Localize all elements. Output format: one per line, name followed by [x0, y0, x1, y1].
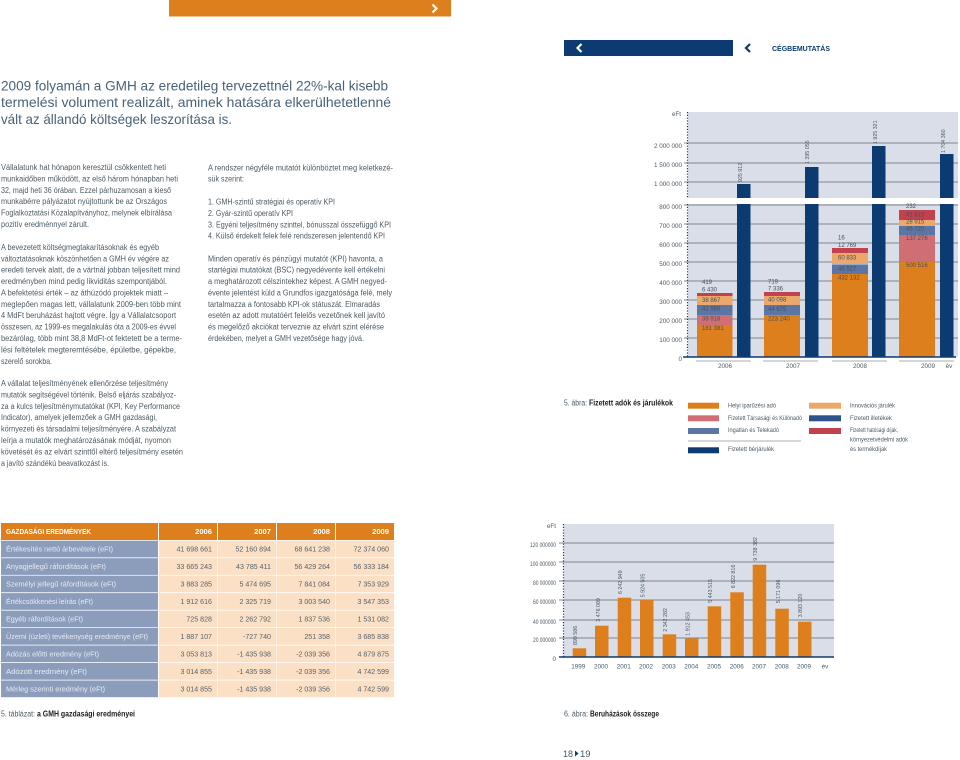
body text: second column: tartalmazza a fontosabb KPI-ok státuszát. Elmaradás: [208, 300, 380, 309]
body text: second column: 1. GMH-szintű stratégiai és operatív KPI: [208, 198, 335, 207]
baseline and x axis labels: [683, 357, 956, 370]
legend: Helyi iparűzési adó: [728, 402, 777, 409]
row: pre-tax result: 3 053 813: [180, 650, 212, 658]
row: other costs: [6, 615, 389, 624]
body text: first column middle: lési feltételek megteremtésébe, épületbe, gépekbe,: [1, 345, 176, 354]
bar value labels: 899 586: [573, 626, 579, 645]
headline: termelési volument realizált, aminek hatására elkerülhetetlenné: [1, 94, 391, 110]
chart background: [688, 112, 958, 357]
row: operating result: -727 740: [243, 633, 271, 641]
y axis labels: 0: [678, 356, 682, 363]
row: other costs: 1 837 536: [298, 616, 330, 624]
navy bar value labels: 1 925 321: [873, 120, 879, 144]
row: material costs: 43 785 411: [236, 563, 271, 571]
legend: Fizetett illetékek: [850, 415, 893, 422]
navy bar value labels: [738, 120, 947, 182]
row: balance sheet result: [6, 684, 389, 694]
body text: second column: startégiai mutatókat (BSC) negyedévente kell értékelni: [208, 266, 385, 275]
bar value labels: 5 443 515: [708, 579, 714, 603]
body text: first column middle: eredeti tervek alatt, de a vártnál jobban teljesített mind: [1, 266, 180, 275]
stacked bar 2008: 46 527: [838, 266, 857, 272]
body text: first column middle: szerelő sorokba.: [1, 357, 52, 366]
row: balance sheet result: 4 742 599: [357, 686, 389, 694]
y axis labels: 100 000: [659, 337, 682, 344]
body text: first column middle: [1, 243, 182, 366]
baseline and x axis labels: 2008: [775, 664, 789, 670]
baseline and x axis labels: 2009: [921, 363, 935, 370]
baseline and x axis labels: [559, 657, 834, 670]
chart background: [564, 524, 834, 657]
legend: [688, 402, 909, 453]
row: after-tax result: -1 435 938: [237, 668, 271, 676]
y axis labels: 500 000: [659, 261, 682, 268]
caption: table 5: 5. táblázat:: [1, 710, 35, 718]
navy bar value labels: 1 395 055: [805, 140, 811, 164]
bar value labels: 5 171 096: [776, 580, 782, 603]
row: other costs: Egyéb ráfordítások (eFt): [6, 615, 83, 624]
gridlines and axis: [559, 524, 834, 657]
y axis labels: 100 000000: [530, 561, 556, 568]
top orange navigation bar: [169, 0, 451, 16]
navy bar value labels: 1 704 360: [941, 129, 947, 153]
row: after-tax result: 3 014 855: [180, 668, 212, 676]
body text: second column: esetén az adott mutatóért felelős vezetőnek kell javító: [208, 311, 386, 320]
y axis labels: 40 000000: [533, 619, 556, 626]
row: net sales: 52 160 894: [235, 546, 271, 554]
y axis labels: [654, 111, 682, 363]
row: depreciation: Értékcsökkenési leírás (eFt): [6, 597, 93, 606]
legend: Innovációs járulék: [850, 402, 896, 409]
baseline and x axis labels: év: [822, 664, 829, 670]
baseline and x axis labels: 2002: [639, 664, 653, 670]
body text: second column: [208, 163, 393, 343]
stacked bar 2007: [764, 280, 800, 357]
y axis labels: 2 000 000: [654, 143, 682, 150]
body text: first column middle: A bevezetett költségmegtakarításoknak és egyéb: [1, 243, 160, 252]
body text: first column top: [1, 163, 178, 229]
row: operating result: 1 887 107: [180, 633, 212, 641]
stacked bar 2008: 16: [838, 236, 845, 242]
table header: GAZDASÁGI EREDMÉNYEK: [6, 527, 91, 536]
y axis labels: 700 000: [659, 223, 682, 230]
table: economic results: [1, 523, 394, 697]
row: pre-tax result: [6, 650, 389, 658]
stacked bar 2006: 38 918: [702, 316, 721, 322]
stacked bar 2006: 42 980: [702, 306, 721, 312]
row: operating result: Üzemi (üzleti) tevékenység eredménye (eFt): [6, 632, 148, 641]
baseline and x axis labels: 2004: [684, 664, 699, 670]
stacked bar 2006: 6 430: [702, 288, 718, 294]
row: personnel costs: 3 883 285: [180, 581, 212, 589]
body text: first column top: 32, majd heti 36 órában. Ezzel párhuzamosan a kieső: [1, 186, 172, 195]
headline: [1, 78, 391, 127]
row: operating result: [6, 632, 389, 641]
row: net sales: 41 698 661: [176, 546, 212, 554]
body text: second column: sük szerint:: [208, 175, 244, 184]
stacked bar 2006: 181 381: [702, 326, 724, 332]
stacked bar chart: taxes and contributions: [654, 111, 958, 370]
orange investment bars: [573, 565, 812, 657]
row: balance sheet result: -2 039 356: [296, 686, 330, 694]
row: net sales: [6, 545, 389, 554]
row: material costs: [6, 562, 389, 571]
row: after-tax result: 4 742 599: [357, 668, 389, 676]
legend: Fizetett Társasági és Különadó: [728, 415, 802, 422]
legend: és termékdíjak: [850, 446, 888, 453]
caption: figure 6: 6. ábra:: [564, 710, 588, 718]
stacked bar 2008: 12 769: [838, 243, 857, 249]
row: after-tax result: Adózott eredmény (eFt): [6, 667, 87, 676]
stacked bar 2007: 7 336: [768, 286, 784, 292]
y axis labels: 800 000: [659, 204, 682, 211]
y axis labels: 60 000000: [533, 599, 556, 606]
row: other costs: 2 262 792: [239, 616, 271, 624]
row: balance sheet result: Mérleg szerinti eredmény (eFt): [6, 684, 105, 694]
bar value labels: 3 893 120: [798, 594, 804, 617]
baseline and x axis labels: 2001: [617, 664, 631, 670]
body text: first column bottom: követését és az elvárt szinttől eltérő teljesítmény esetén: [1, 447, 183, 456]
body text: first column top: Foglalkoztatási Közalapítványhoz, melynek elbírálása: [1, 209, 173, 218]
row: depreciation: 1 912 616: [180, 598, 212, 606]
stacked bar 2009: 41 615: [906, 212, 925, 218]
y axis labels: 0: [552, 656, 556, 663]
row: material costs: 33 665 243: [176, 563, 212, 571]
y axis labels: 80 000000: [533, 580, 556, 587]
section label: company presentation: [746, 44, 830, 53]
table header: 2006: [195, 527, 212, 536]
stacked bar 2009: 46 720: [906, 226, 925, 232]
y axis labels: 1 000 000: [654, 181, 682, 188]
stacked bar 2008: 60 833: [838, 256, 857, 262]
table header: 2009: [372, 527, 389, 536]
navy contribution bars: [737, 146, 954, 357]
body text: second column: 3. Egyéni teljesítmény szinttel, bónusszal összefüggő KPI: [208, 220, 391, 229]
row: other costs: 725 828: [186, 616, 212, 624]
row: other costs: 1 531 082: [357, 616, 389, 624]
table row backgrounds: [1, 541, 394, 697]
body text: first column middle: összesen, az 1999-es megalakulás óta a 2009-es évvel: [1, 323, 176, 332]
body text: first column top: munkaidőben működött, az első három hónapban heti: [1, 174, 178, 183]
row: operating result: 3 685 838: [357, 633, 389, 641]
bar value labels: 2 342 282: [663, 608, 669, 632]
stacked bar 2009: 137 276: [906, 236, 928, 242]
body text: first column bottom: [1, 379, 183, 468]
body text: first column bottom: Indicator), amelyek jellemzőek a GMH gazdasági,: [1, 413, 157, 422]
y axis labels: 200 000: [659, 318, 682, 325]
stacked bar 2006: 419: [702, 280, 713, 286]
body text: first column middle: meglepően magas lett, vállalatunk 2009-ben több mint: [1, 300, 182, 309]
stacked bar 2006: [697, 280, 732, 357]
y axis labels: 300 000: [659, 299, 682, 306]
body text: first column middle: eredményben mind pedig likviditás szempontjából.: [1, 277, 167, 286]
row: pre-tax result: 4 879 875: [357, 650, 389, 658]
stacked bar 2009: 232: [906, 204, 917, 210]
stacked bar 2007: 223 240: [768, 316, 790, 322]
table header: 2007: [254, 527, 271, 536]
baseline and x axis labels: 2006: [730, 664, 744, 670]
row: depreciation: 3 003 540: [298, 598, 330, 606]
stacked bar 2008: [832, 236, 868, 357]
legend: Fizetett hatósági díjak,: [850, 427, 898, 434]
row: net sales: 68 641 238: [294, 546, 330, 554]
body text: first column middle: A befektetési érték – az áthúzódó projektek miatt –: [1, 288, 169, 298]
table header: 2008: [313, 527, 330, 536]
row: personnel costs: 5 474 695: [239, 581, 271, 589]
body text: second column: A rendszer négyféle mutatót különböztet meg keletkezé-: [208, 163, 393, 172]
caption: figure 5: Fizetett adók és járulékok: [589, 398, 674, 408]
navy bar value labels: 925 912: [738, 163, 744, 182]
row: material costs: 56 429 264: [294, 563, 330, 571]
row: after-tax result: [6, 667, 389, 676]
body text: second column: 4. Külső érdekelt felek felé rendszeresen jelentendő KPI: [208, 232, 385, 241]
stacked bar 2008: 432 132: [838, 276, 860, 282]
baseline and x axis labels: 2007: [752, 664, 766, 670]
row: pre-tax result: -1 435 938: [237, 650, 271, 658]
y axis labels: [530, 523, 556, 663]
headline: 2009 folyamán a GMH az eredetileg tervezettnél 22%-kal kisebb: [1, 78, 388, 94]
section label: company presentation: CÉGBEMUTATÁS: [772, 44, 830, 53]
bar value labels: [573, 537, 804, 645]
bar value labels: 6 242 949: [618, 570, 624, 594]
body text: first column top: Vállalatunk hat hónapon keresztül csökkentett heti: [1, 163, 166, 172]
baseline and x axis labels: 2000: [594, 664, 608, 670]
row: depreciation: [6, 597, 389, 606]
table header: [1, 523, 394, 540]
caption: table 5: [1, 710, 135, 718]
y axis labels: eFt: [672, 111, 681, 118]
body text: second column: 2. Gyár-szintű operatív KPI: [208, 209, 293, 218]
y axis labels: eFt: [547, 523, 556, 530]
stacked bar 2007: 40 098: [768, 298, 787, 304]
stacked bar 2009: 28 915: [906, 220, 925, 226]
baseline and x axis labels: 2008: [853, 363, 867, 370]
y axis labels: 600 000: [659, 242, 682, 249]
headline: vált az állandó költségek leszorítása is.: [1, 111, 232, 127]
top navy navigation bar: [564, 40, 733, 56]
caption: figure 5: 5. ábra:: [564, 398, 587, 408]
stacked bar 2007: 719: [768, 280, 779, 286]
row: personnel costs: 7 353 929: [357, 581, 389, 589]
caption: figure 6: [564, 710, 660, 718]
row: pre-tax result: Adózás előtti eredmény (eFt): [6, 650, 99, 658]
body text: first column top: munkabérre pályázatot nyújtottunk be az Országos: [1, 197, 167, 206]
page numbers: 19: [580, 749, 590, 760]
bar value labels: 3 476 089: [596, 598, 602, 622]
bar value labels: 6 822 816: [731, 565, 737, 588]
body text: first column bottom: za a kulcs teljesítménymutatókat (KPI, Key Performance: [1, 402, 180, 411]
bar value labels: 5 924 505: [640, 574, 646, 597]
body text: second column: és megelőző akciókat terveznie az elvárt szint elérése: [208, 322, 384, 331]
gridlines and axis: [684, 112, 958, 357]
baseline and x axis labels: 2006: [718, 363, 732, 370]
bar chart: total investments: [530, 523, 834, 670]
row: operating result: 251 358: [304, 633, 330, 641]
row: depreciation: 3 547 353: [357, 598, 389, 606]
body text: first column bottom: a javító szándékú beavatkozást is.: [1, 459, 109, 468]
row: balance sheet result: 3 014 855: [180, 686, 212, 694]
y axis labels: 120 000000: [530, 542, 556, 549]
stacked bar 2009: [899, 204, 935, 357]
row: material costs: Anyagjellegű ráfordítások (eFt): [6, 562, 106, 571]
row: depreciation: 2 325 719: [239, 598, 271, 606]
caption: figure 6: Beruházások összege: [590, 710, 660, 718]
page numbers: [563, 749, 590, 760]
body text: first column bottom: mutatók segítségével történik. Belső eljárás szabályoz-: [1, 390, 176, 399]
row: pre-tax result: -2 039 356: [296, 650, 330, 658]
stacked bar 2007: 44 675: [768, 307, 787, 313]
body text: first column middle: bezárólag, több mint 38,8 MdFt-ot fektetett be a terme-: [1, 334, 182, 343]
page numbers: 18: [563, 749, 573, 760]
legend: Ingatlan és Telekadó: [728, 427, 779, 434]
body text: second column: érdekében, melyet a GMH vezetősége hagy jóvá.: [208, 334, 364, 343]
baseline and x axis labels: 1999: [571, 664, 586, 670]
legend: környezetvédelmi adók: [850, 436, 909, 444]
row: personnel costs: [6, 580, 389, 589]
body text: first column bottom: A vállalat teljesítményének ellenőrzése teljesítmény: [1, 379, 168, 388]
bar value labels: 1 912 453: [686, 612, 692, 636]
baseline and x axis labels: 2009: [797, 664, 811, 670]
bar value labels: 9 738 382: [753, 537, 759, 561]
baseline and x axis labels: 2007: [786, 363, 800, 370]
legend: Fizetett bérjárulék: [728, 446, 775, 453]
caption: table 5: a GMH gazdasági eredményei: [37, 710, 135, 718]
baseline and x axis labels: 2005: [707, 664, 721, 670]
row: after-tax result: -2 039 356: [296, 668, 330, 676]
body text: first column bottom: leírja a mutatók meghatározásának módját, nyomon: [1, 436, 171, 445]
row: balance sheet result: -1 435 938: [237, 686, 271, 694]
body text: first column bottom: környezeti és társadalmi teljesítményére. A szabályzat: [1, 425, 177, 434]
body text: first column middle: 4 MdFt beruházást hajtott végre. Így a Vállalatcsoport: [1, 311, 177, 320]
baseline and x axis labels: 2003: [662, 664, 676, 670]
stacked bar 2009: 500 516: [906, 263, 928, 269]
body text: second column: a meghatározott célszintekhez képest. A GMH negyed-: [208, 277, 387, 286]
stacked bar 2006: 38 867: [702, 298, 721, 304]
row: personnel costs: 7 841 084: [298, 581, 330, 589]
y axis labels: 400 000: [659, 280, 682, 287]
y axis labels: 1 500 000: [654, 162, 682, 169]
row: net sales: Értékesítés nettó árbevétele (eFt): [6, 545, 113, 554]
baseline and x axis labels: év: [946, 363, 953, 370]
body text: second column: évente jelentést küld a Grundfos igazgatósága felé, mely: [208, 288, 392, 297]
body text: first column top: pozitív eredménnyel zárult.: [1, 220, 89, 229]
row: personnel costs: Személyi jellegű ráfordítások (eFt): [6, 580, 116, 589]
body text: second column: Minden operatív és pénzügyi mutatót (KPI) havonta, a: [208, 254, 384, 263]
y axis labels: 20 000000: [533, 637, 556, 644]
row: material costs: 56 333 184: [353, 563, 389, 571]
row: net sales: 72 374 060: [353, 546, 389, 554]
body text: first column middle: változtatásoknak köszönhetően a GMH év végére az: [1, 254, 169, 263]
